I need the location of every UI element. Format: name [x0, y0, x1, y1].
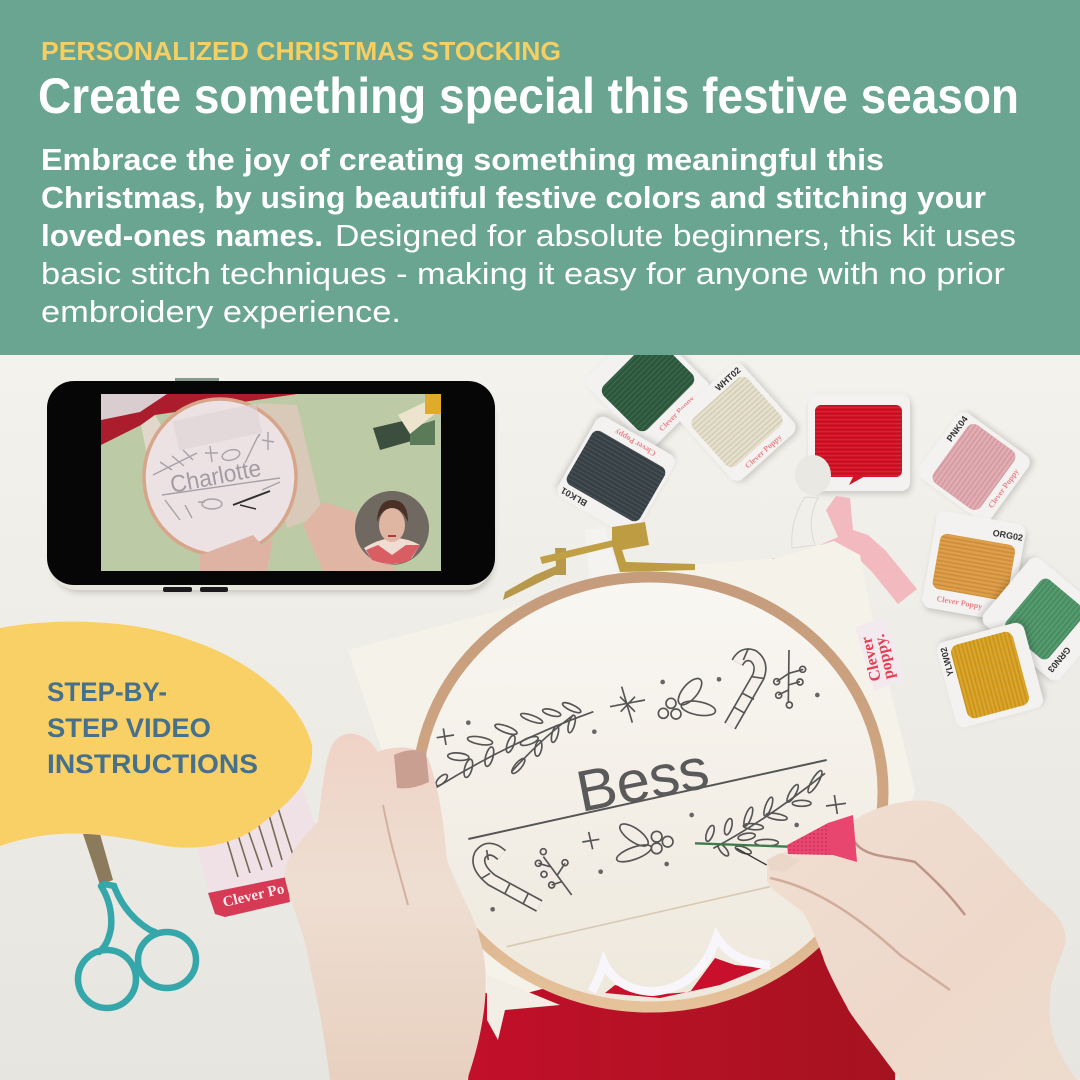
- body text: Designed for absolute beginners, this kit uses: [335, 218, 1016, 253]
- orange thread: ORG02: [992, 528, 1024, 543]
- stocking: [348, 541, 915, 1080]
- body text: [41, 142, 1016, 329]
- thread cards: [554, 320, 1080, 729]
- light green thread: GRN03: [1046, 645, 1073, 674]
- upper-left sprig: [434, 701, 593, 788]
- pink thread: PNK04: [945, 414, 970, 444]
- scissors: [78, 834, 196, 1008]
- on-screen hands: [200, 535, 273, 571]
- on-screen hoop: [144, 399, 296, 555]
- mistletoe top: [774, 650, 806, 708]
- body text: loved-ones names.: [41, 218, 323, 253]
- cream thread: WHT02: [713, 365, 743, 393]
- thumbnail: [394, 750, 429, 788]
- stitched pattern: [434, 648, 846, 992]
- pink thread: [915, 409, 1033, 525]
- body text: Christmas, by using beautiful festive colors and stitching your: [41, 180, 986, 215]
- light green thread: [979, 554, 1080, 684]
- candy cane bottom: [479, 849, 539, 906]
- brand tag: [855, 617, 905, 691]
- holly top: [658, 675, 717, 719]
- green thread and needle: [695, 843, 788, 847]
- needle pack: Clever Po: [221, 881, 286, 911]
- on-screen hoop: Charlotte: [168, 455, 263, 499]
- mustard thread: [935, 621, 1045, 729]
- video screen: [101, 394, 441, 571]
- crosses: [437, 728, 846, 849]
- photo background: [0, 355, 1080, 1080]
- left hand: [285, 734, 486, 1080]
- scalloped trim: [592, 937, 770, 992]
- red thread: [808, 394, 910, 491]
- mistletoe bottom: [535, 849, 572, 895]
- phone showing video: [47, 378, 495, 592]
- black thread: [554, 414, 678, 538]
- cream thread: Clever Poppy: [743, 433, 784, 470]
- stitched name: Bess: [571, 736, 714, 825]
- cream thread: [675, 360, 799, 484]
- white cuff: [348, 541, 915, 1000]
- on-screen thread cards: [373, 394, 441, 450]
- eyebrow heading: PERSONALIZED CHRISTMAS STOCKING: [41, 36, 561, 66]
- embroidery hoop: [417, 577, 883, 1007]
- thimble: [787, 815, 857, 862]
- dots: [466, 677, 820, 912]
- callout: video instructions: [0, 622, 312, 848]
- name guide line: [468, 760, 827, 839]
- right hand and thimble: [767, 801, 1077, 1080]
- brass screw clasp: [503, 522, 695, 600]
- fold line: [507, 887, 770, 947]
- candy cane top: [730, 648, 763, 726]
- red body: [380, 558, 905, 1080]
- pink thread: Clever Poppy: [986, 467, 1021, 510]
- main title: Create something special this festive season: [38, 68, 1019, 124]
- star: [610, 687, 645, 723]
- orange thread: [921, 510, 1027, 622]
- black thread: BLK01: [559, 485, 589, 508]
- dark gap between fingers: [855, 855, 960, 960]
- header panel: [0, 0, 1080, 355]
- dark green thread: Clever Poppy: [657, 394, 696, 433]
- body text: embroidery experience.: [41, 294, 401, 329]
- callout: video instructions: INSTRUCTIONS: [47, 749, 258, 779]
- orange thread: Clever Poppy: [936, 594, 983, 611]
- callout: video instructions: STEP-BY-: [47, 677, 167, 707]
- holly bottom: [615, 820, 673, 865]
- body text: basic stitch techniques - making it easy for anyone with no prior: [41, 256, 1005, 291]
- needle pack: [197, 780, 315, 917]
- index fingernail: [767, 853, 800, 872]
- presenter circle: [355, 491, 429, 565]
- red stocking behind scallop: [605, 958, 762, 998]
- brand tag: Clever: [858, 635, 885, 683]
- callout: video instructions: STEP VIDEO: [47, 713, 211, 743]
- body text: Embrace the joy of creating something meaningful this: [41, 142, 884, 177]
- brand tag: poppy.: [871, 632, 898, 681]
- dark green thread: [583, 320, 713, 450]
- black thread: Clever Poppy: [613, 427, 658, 458]
- lower sprig: [704, 769, 825, 858]
- mustard thread: YLW02: [938, 646, 956, 677]
- pink tassel and white hanging loop: [792, 455, 917, 604]
